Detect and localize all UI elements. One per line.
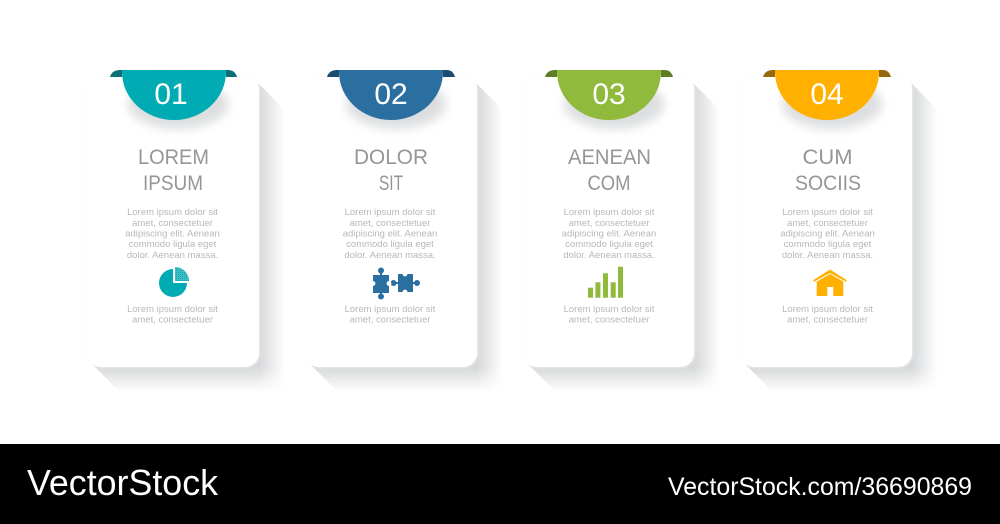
card 1 ribbon xyxy=(122,70,226,120)
card 1 body text: amet, consectetuer xyxy=(132,218,213,229)
footer bar xyxy=(0,444,1000,524)
card 2 ribbon xyxy=(339,70,443,120)
card 3 ribbon folds xyxy=(545,70,673,77)
footer logo: VectorStock xyxy=(27,462,219,503)
card 1 long shadow xyxy=(93,84,285,392)
panel: card 2 xyxy=(305,70,503,392)
panel: card 1 xyxy=(87,70,285,392)
card 1 heading: LOREM xyxy=(138,146,209,169)
card 4 number: 04 xyxy=(810,78,844,111)
card 1 body text: adipiscing elit. Aenean xyxy=(125,228,220,240)
card 3 body text: adipiscing elit. Aenean xyxy=(562,228,656,240)
card 2 ribbon folds xyxy=(327,70,455,77)
card 1 heading: IPSUM xyxy=(143,172,203,195)
card 3 body text: amet, consectetuer xyxy=(569,218,649,229)
card 2 edge glow xyxy=(305,75,477,367)
card 3 body text: Lorem ipsum dolor sit xyxy=(564,207,655,218)
card 3 ribbon xyxy=(557,70,661,120)
card 3 caption: amet, consectetuer xyxy=(569,314,649,326)
card 1 caption: amet, consectetuer xyxy=(132,314,213,326)
card 4 body text: Lorem ipsum dolor sit xyxy=(782,207,873,218)
card 4 body text: amet, consectetuer xyxy=(787,218,868,229)
card 2 long shadow xyxy=(311,84,503,392)
card 4 long shadow xyxy=(746,84,938,392)
card 1 body xyxy=(87,75,259,367)
card 4 edge glow xyxy=(740,75,912,367)
card 1 body text: Lorem ipsum dolor sit xyxy=(127,207,218,218)
icon: bar chart xyxy=(588,267,623,298)
panel: card 3 xyxy=(523,70,720,392)
card 3 edge glow xyxy=(523,75,694,367)
card 2 heading: DOLOR xyxy=(354,146,428,169)
footer image id: VectorStock.com/36690869 xyxy=(668,473,972,501)
panel: card 4 xyxy=(740,70,938,392)
card 2 body text: amet, consectetuer xyxy=(350,218,430,229)
card 2 number: 02 xyxy=(374,78,408,111)
icon: puzzle pieces xyxy=(371,268,420,300)
card 3 number: 03 xyxy=(592,78,626,111)
card 2 body text: commodo ligula eget xyxy=(346,239,434,250)
card 2 caption: Lorem ipsum dolor sit xyxy=(345,304,436,315)
card 4 heading: CUM xyxy=(802,146,852,169)
card 4 heading: SOCIIS xyxy=(795,172,861,195)
card 2 caption: amet, consectetuer xyxy=(350,314,430,326)
card 1 body text: commodo ligula eget xyxy=(129,239,217,250)
card 2 body xyxy=(305,75,477,367)
card 3 heading: AENEAN xyxy=(568,146,651,169)
card 1 ribbon shadow xyxy=(128,79,228,129)
card 4 body text: commodo ligula eget xyxy=(784,239,872,250)
card 2 ribbon shadow xyxy=(346,79,446,129)
card 3 heading: COM xyxy=(588,172,630,195)
card 3 body text: commodo ligula eget xyxy=(565,239,653,250)
card 1 number: 01 xyxy=(154,78,188,111)
card 2 body text: dolor. Aenean massa. xyxy=(344,250,436,261)
icon: pie chart xyxy=(159,267,189,297)
card 3 caption: Lorem ipsum dolor sit xyxy=(564,304,655,315)
card 3 body xyxy=(523,75,694,367)
card 2 body text: adipiscing elit. Aenean xyxy=(343,228,437,240)
card 3 ribbon shadow xyxy=(564,79,664,129)
card 3 body text: dolor. Aenean massa. xyxy=(563,250,655,261)
card 4 body text: dolor. Aenean massa. xyxy=(782,250,873,261)
card 4 caption: Lorem ipsum dolor sit xyxy=(782,304,873,315)
card 2 body text: Lorem ipsum dolor sit xyxy=(345,207,436,218)
card 1 ribbon folds xyxy=(110,70,237,77)
card 1 caption: Lorem ipsum dolor sit xyxy=(127,304,218,315)
card 4 caption: amet, consectetuer xyxy=(787,314,868,326)
card 4 body xyxy=(740,75,912,367)
card 1 edge glow xyxy=(87,75,259,367)
icon: house xyxy=(814,270,846,296)
card 4 body text: adipiscing elit. Aenean xyxy=(780,228,875,240)
card 4 ribbon folds xyxy=(763,70,891,77)
card 1 body text: dolor. Aenean massa. xyxy=(127,250,218,261)
card 2 heading: SIT xyxy=(379,172,403,195)
card 4 ribbon shadow xyxy=(782,79,882,129)
card 3 long shadow xyxy=(529,84,720,392)
card 4 ribbon xyxy=(775,70,879,120)
